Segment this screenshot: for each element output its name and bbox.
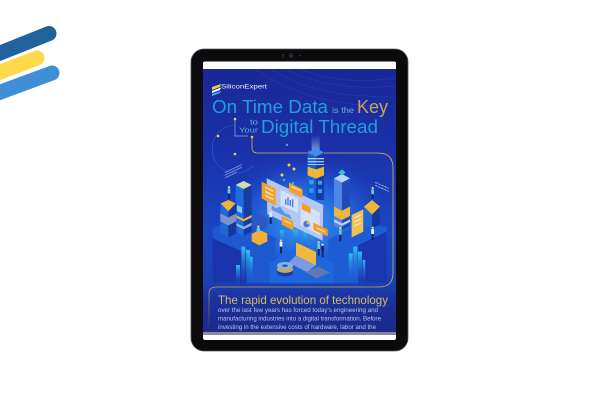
laptop screen [296, 242, 316, 265]
right dark side [358, 232, 387, 283]
section heading: The rapid evolution of technology [218, 293, 388, 307]
tower left face [220, 203, 228, 237]
title small your: Your [239, 126, 259, 134]
people figures [228, 186, 374, 257]
body copy [218, 293, 388, 331]
pair by laptop [317, 241, 324, 257]
tower yellow band [308, 167, 324, 179]
laptop [289, 242, 316, 272]
floating blue dots [283, 144, 294, 184]
tower left face [236, 185, 244, 236]
person far left [228, 186, 230, 199]
logo mark [212, 84, 221, 96]
screen inner white panes [281, 190, 298, 213]
disc stack [277, 262, 293, 276]
bottom page shadow [203, 332, 396, 335]
card lower left [282, 216, 293, 230]
person right tower [339, 227, 342, 241]
person left of screen [269, 210, 272, 224]
screen panel [267, 178, 323, 241]
tower band [220, 213, 236, 225]
orbit arcs [212, 125, 254, 173]
screen page [203, 62, 396, 340]
tower shaft blue [308, 150, 316, 200]
bar chart [285, 197, 293, 207]
left platform [213, 218, 277, 283]
tower panel [237, 205, 242, 213]
tablet device [191, 49, 408, 351]
circuit chip [305, 267, 330, 278]
tower top [334, 174, 350, 183]
person centre [280, 239, 282, 253]
tower glow beam [312, 136, 320, 150]
laptop keyboard [289, 255, 316, 272]
screen side edge [323, 205, 325, 241]
tower yellow band [334, 207, 350, 220]
card text lines [265, 186, 325, 233]
cube left face [364, 207, 372, 228]
left tall tower [236, 181, 252, 236]
central tower [308, 135, 324, 200]
paragraph [218, 307, 381, 331]
yellow form card [352, 209, 363, 237]
logo [212, 84, 267, 96]
decorative brand stripes [0, 34, 52, 96]
tower stripes [236, 215, 252, 221]
isometric illustration [213, 135, 389, 283]
logo wordmark: SiliconExpert [221, 84, 267, 90]
tower white stripes [334, 219, 350, 226]
title connector words: is the [332, 106, 355, 115]
small isometric caption right [375, 182, 389, 191]
right tower [334, 169, 350, 230]
title bracket [235, 119, 248, 136]
yellow tile top [364, 200, 380, 215]
left glowing columns [236, 247, 253, 283]
pie chart [303, 221, 310, 227]
camera and sensors [282, 53, 301, 58]
tower cap [308, 148, 324, 157]
centre glowing columns [280, 230, 308, 240]
tower right face [244, 185, 252, 236]
tower right face [342, 178, 350, 230]
main dashboard screen [267, 178, 325, 241]
paragraph line one: over the last few years has forced today's engineering and [218, 307, 378, 314]
title line one: On Time Data [212, 97, 329, 117]
tower left face [334, 178, 342, 230]
tower right face [228, 203, 236, 237]
card top centre [289, 182, 303, 198]
gold dots [217, 118, 253, 155]
infographic canvas [0, 26, 408, 352]
teal cap [338, 169, 346, 175]
left dark side [213, 238, 247, 283]
card top left [262, 182, 276, 206]
central glow [252, 164, 370, 261]
left small tower [220, 200, 236, 237]
tablet body [191, 49, 408, 351]
tower stripes [308, 158, 324, 165]
title [212, 97, 388, 137]
top right light rays [255, 69, 396, 106]
tower lower panels [309, 180, 322, 193]
yellow box [252, 230, 267, 245]
lower cover shading [203, 282, 396, 332]
card centre speech [302, 203, 311, 214]
cover background [203, 69, 396, 332]
title small to: to [250, 118, 258, 126]
title line two: Digital Thread [261, 117, 378, 137]
area chart [272, 205, 292, 219]
paragraph line two: manufacturing industries into a digital transformation. Before [218, 316, 381, 322]
card lower right [313, 223, 328, 236]
orange floating cards [262, 182, 328, 236]
paragraph line three: investing in the extensive costs of hardware, labor and the [218, 324, 376, 331]
server grid block [252, 213, 267, 232]
cube right face [372, 207, 380, 228]
right cube stack [364, 200, 380, 228]
centre platform [269, 245, 333, 283]
tower top [236, 181, 252, 189]
circuit network motif [209, 118, 393, 332]
gold thread line [209, 137, 393, 332]
floating data dots [280, 164, 296, 176]
person right card [371, 226, 374, 240]
title highlight word: Key [357, 97, 388, 117]
person seated [257, 225, 260, 232]
brochure cover [203, 69, 397, 332]
yellow diamond top [221, 200, 236, 211]
person on cube [371, 187, 374, 199]
right glowing columns [349, 247, 365, 283]
small isometric caption left [225, 165, 242, 178]
form card lines [354, 214, 361, 227]
right platform [328, 225, 387, 283]
